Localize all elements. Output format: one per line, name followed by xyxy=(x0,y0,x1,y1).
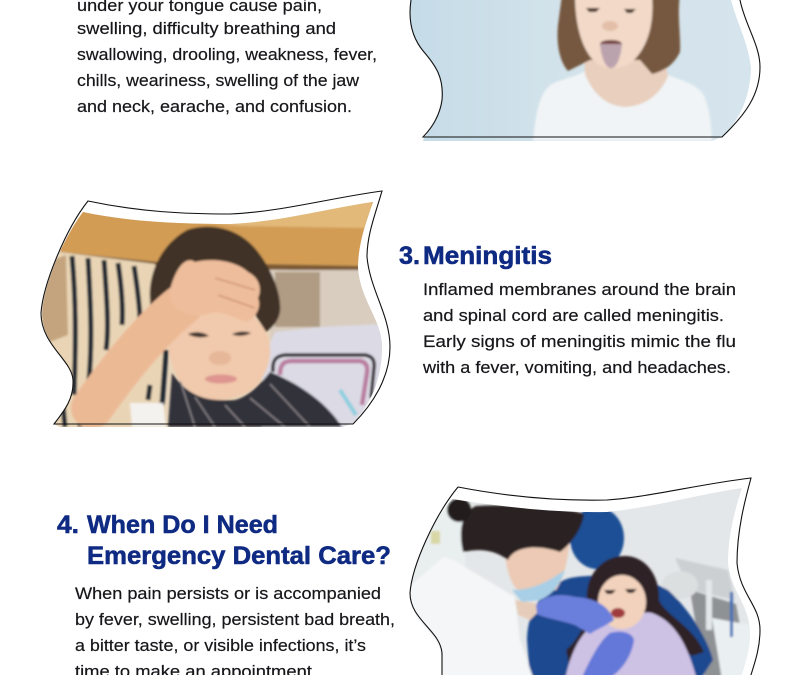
section 2 body text xyxy=(77,0,377,116)
dentist's face xyxy=(505,540,570,592)
chair headrest xyxy=(570,507,624,569)
girl's white dress xyxy=(533,70,712,141)
boy's face xyxy=(169,308,270,400)
boy's arm xyxy=(92,305,182,408)
heading: 4. When Do I Need Emergency Dental Care?: When Do I Need xyxy=(87,511,278,539)
child's jacket xyxy=(565,612,697,675)
boy's scarf xyxy=(168,372,342,427)
section 3 body text: Inflamed membranes around the brain xyxy=(423,280,736,299)
heading: 3. Meningitis: 3. xyxy=(399,242,420,270)
photo: boy with headache xyxy=(40,191,390,430)
wooden headboard xyxy=(60,202,373,268)
section 2 body text: and neck, earache, and confusion. xyxy=(77,97,352,116)
heading: 4. When Do I Need Emergency Dental Care?: 4. xyxy=(57,511,79,539)
girl's face xyxy=(575,0,652,68)
clinic counter xyxy=(675,558,735,600)
section 4 body text: by fever, swelling, persistent bad breath, xyxy=(75,610,395,629)
child's hair xyxy=(566,556,704,668)
section 3 body text: Early signs of meningitis mimic the flu xyxy=(423,332,736,351)
girl's tongue xyxy=(600,44,622,68)
yellow bottle xyxy=(431,531,440,544)
wall on left xyxy=(444,499,467,554)
dentist's surgical mask xyxy=(512,570,565,602)
boy's eyes xyxy=(188,332,251,337)
lower glove xyxy=(583,632,634,675)
heading: 4. When Do I Need Emergency Dental Care? xyxy=(57,511,391,570)
boy's shirt xyxy=(130,403,166,427)
section 2 body text: chills, weariness, swelling of the jaw xyxy=(77,71,360,90)
dentist's hair xyxy=(461,505,584,560)
clinic sink xyxy=(662,571,698,599)
photo: dentist examining child xyxy=(405,478,760,675)
child's mouth xyxy=(611,608,625,618)
section 2 body text: swallowing, drooling, weakness, fever, xyxy=(77,45,377,64)
section 4 body text xyxy=(75,584,395,675)
section 3 body text: with a fever, vomiting, and headaches. xyxy=(422,358,731,377)
section 4 body text: When pain persists or is accompanied xyxy=(75,584,381,603)
photo: girl sticking out tongue xyxy=(405,0,765,145)
boy's nose xyxy=(209,351,231,365)
dental tray xyxy=(712,618,755,675)
section 3 body text: and spinal cord are called meningitis. xyxy=(423,306,724,325)
girl's neck xyxy=(584,60,668,107)
girl's mouth xyxy=(600,40,622,48)
lavender pillow xyxy=(262,324,385,430)
dental chair xyxy=(527,576,713,675)
dentist's arm xyxy=(515,600,545,620)
heading: 3. Meningitis: Meningitis xyxy=(423,242,552,270)
child's face xyxy=(598,575,646,629)
boy's hair xyxy=(150,227,280,332)
girl's hair xyxy=(557,0,680,74)
section 3 body text xyxy=(422,280,736,377)
left striped pillow xyxy=(55,250,166,427)
section 2 body text: swelling, difficulty breathing and xyxy=(77,19,336,38)
section 4 body text: a bitter taste, or visible infections, it’s xyxy=(75,636,366,655)
girl's eyes xyxy=(586,8,636,13)
heading: 4. When Do I Need Emergency Dental Care?: Emergency Dental Care? xyxy=(87,542,391,570)
right pillow xyxy=(270,270,385,340)
boy's hand xyxy=(170,260,260,322)
upper glove xyxy=(536,595,614,634)
boy's mouth xyxy=(205,374,237,384)
dentist's white coat xyxy=(405,557,534,675)
girl's nose xyxy=(602,21,618,31)
child's eyes xyxy=(604,589,637,594)
